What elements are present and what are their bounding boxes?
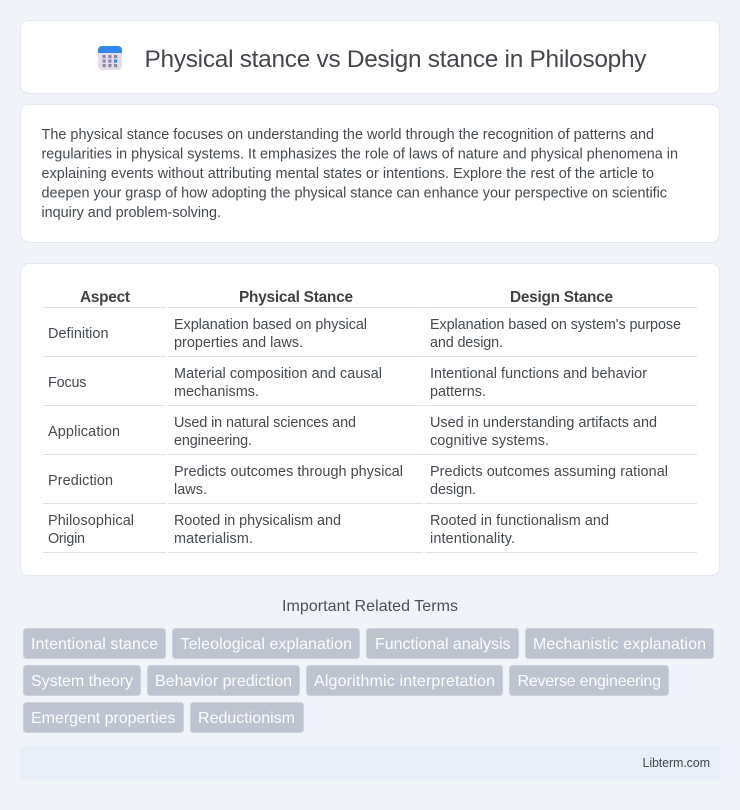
- intro paragraph: The physical stance focuses on understanding the world through the recognition of patterns and: [42, 127, 654, 143]
- row: focus: mechanisms.: [174, 384, 259, 400]
- intro paragraph: deepen your grasp of how adopting the physical stance can enhance your perspective on scientific: [42, 186, 667, 202]
- tag: behavior prediction: [148, 666, 300, 696]
- tag: emergent properties: [24, 702, 184, 732]
- panel: comparison table: [20, 264, 720, 576]
- row: prediction: design.: [430, 482, 476, 498]
- row: philosophical origin: intentionality.: [430, 531, 515, 547]
- tag: emergent properties: Emergent properties: [31, 710, 176, 727]
- row: philosophical origin: materialism.: [174, 531, 253, 547]
- row: definition: [43, 317, 697, 357]
- row: prediction: laws.: [174, 482, 207, 498]
- intro paragraph: explaining events without attributing mental states or intentions. Explore the rest of the article to: [42, 166, 654, 182]
- tag: system theory: System theory: [31, 673, 133, 690]
- row: philosophical origin: Rooted in physicalism and: [174, 513, 341, 529]
- row: definition: Definition: [48, 326, 108, 342]
- row: focus: Intentional functions and behavior: [430, 366, 647, 382]
- panel: header: [20, 20, 720, 94]
- row: application: cognitive systems.: [430, 433, 549, 449]
- row: philosophical origin: [43, 513, 697, 553]
- tag: reductionism: [190, 702, 304, 732]
- table header row: Design Stance: [510, 289, 613, 306]
- table header row: Physical Stance: [239, 289, 353, 306]
- row: philosophical origin: Philosophical: [48, 513, 134, 529]
- intro paragraph: regularities in physical systems. It emphasizes the role of laws of nature and physical phenomena in: [42, 146, 678, 162]
- row: definition: properties and laws.: [174, 335, 303, 351]
- row: definition: and design.: [430, 335, 503, 351]
- tag: algorithmic interpretation: Algorithmic interpretation: [314, 673, 495, 690]
- tag group: related terms: [24, 628, 714, 732]
- row: prediction: Predicts outcomes assuming rational: [430, 464, 668, 480]
- tag: reverse engineering: Reverse engineering: [518, 673, 661, 690]
- row: application: Application: [48, 424, 120, 440]
- panel: intro text: [20, 104, 720, 242]
- tag: teleological explanation: Teleological explanation: [180, 636, 352, 653]
- footer: [20, 746, 720, 780]
- table header row: Aspect: [80, 289, 130, 306]
- tag: functional analysis: [366, 628, 518, 658]
- tag: intentional stance: [24, 628, 166, 658]
- tag: reverse engineering: [510, 666, 668, 696]
- heading: important related terms: Important Related Terms: [282, 598, 458, 615]
- row: focus: patterns.: [430, 384, 486, 400]
- row: application: engineering.: [174, 433, 252, 449]
- icon: calendar: [98, 46, 122, 70]
- row: focus: Material composition and causal: [174, 366, 382, 382]
- row: focus: Focus: [48, 375, 86, 391]
- tag: mechanistic explanation: Mechanistic explanation: [533, 636, 706, 653]
- tag: teleological explanation: [172, 628, 360, 658]
- table header row: [43, 289, 697, 308]
- tag: algorithmic interpretation: [306, 666, 502, 696]
- tag: behavior prediction: Behavior prediction: [155, 673, 292, 690]
- tag: intentional stance: Intentional stance: [31, 636, 158, 653]
- row: prediction: [43, 464, 697, 504]
- tag: mechanistic explanation: [526, 628, 714, 658]
- row: definition: Explanation based on physical: [174, 317, 367, 333]
- row: application: [43, 415, 697, 455]
- row: definition: Explanation based on system's purpose: [430, 317, 681, 333]
- row: application: Used in natural sciences and: [174, 415, 356, 431]
- row: prediction: Prediction: [48, 473, 113, 489]
- tag: functional analysis: Functional analysis: [375, 636, 510, 653]
- intro paragraph: inquiry and problem-solving.: [42, 205, 221, 221]
- intro paragraph: [42, 127, 678, 221]
- title: Physical stance vs Design stance in Philosophy: [144, 46, 647, 73]
- footer credit: Libterm.com: [642, 756, 710, 770]
- row: focus: [43, 366, 697, 406]
- row: philosophical origin: Origin: [48, 531, 85, 547]
- row: application: Used in understanding artifacts and: [430, 415, 657, 431]
- tag: reductionism: Reductionism: [198, 710, 295, 727]
- tag: system theory: [24, 666, 140, 696]
- row: prediction: Predicts outcomes through physical: [174, 464, 403, 480]
- row: philosophical origin: Rooted in functionalism and: [430, 513, 609, 529]
